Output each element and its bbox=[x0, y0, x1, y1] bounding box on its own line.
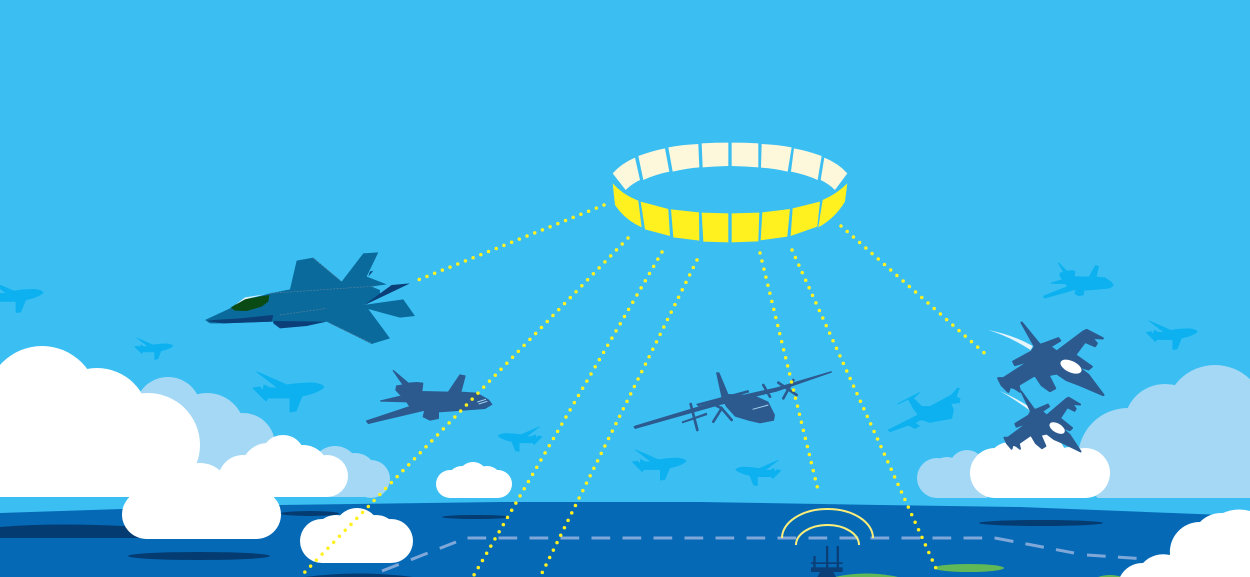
white cloud over ocean bbox=[300, 508, 413, 563]
dotted signal lines bbox=[302, 205, 990, 575]
small plane lower centre bbox=[632, 450, 686, 480]
small plane facing left lower centre bbox=[736, 460, 781, 486]
yellow and cream ring bbox=[613, 143, 847, 242]
back cloud left bbox=[135, 377, 275, 497]
back cloud centre right bbox=[917, 450, 987, 498]
F-35 fighter jet bbox=[205, 252, 415, 344]
back cloud right bbox=[1078, 365, 1250, 508]
back cloud centre left bbox=[311, 446, 390, 498]
islands bbox=[835, 564, 1122, 577]
white cloud lower left bbox=[122, 463, 281, 539]
ring: yellow lower panels bbox=[613, 183, 847, 242]
icon: oil rig bbox=[811, 546, 843, 577]
white cloud bottom right bbox=[1120, 510, 1250, 577]
small plane mid left bbox=[253, 372, 324, 412]
dashed flight route bbox=[382, 538, 1160, 571]
small plane facing left centre bbox=[498, 427, 542, 451]
white cloud mid left bbox=[218, 435, 348, 505]
small plane left bbox=[135, 338, 173, 359]
dark trijet plane bbox=[367, 371, 492, 423]
ring: cream upper panels bbox=[613, 143, 847, 190]
ocean bbox=[0, 502, 1250, 577]
big white cloud left bbox=[0, 346, 200, 497]
small trijet upper right bbox=[1044, 263, 1113, 298]
C-130 transport plane bbox=[633, 371, 832, 430]
small plane far right bbox=[1146, 321, 1197, 350]
small white cloud centre bbox=[436, 462, 512, 498]
radar arcs bbox=[782, 509, 873, 545]
white cloud under fighters bbox=[970, 433, 1110, 498]
F-16 fighter jet lower bbox=[1000, 391, 1081, 452]
small transport plane right bbox=[888, 388, 960, 432]
small plane far left bbox=[0, 281, 43, 313]
F-16 fighter jet upper bbox=[988, 323, 1103, 395]
